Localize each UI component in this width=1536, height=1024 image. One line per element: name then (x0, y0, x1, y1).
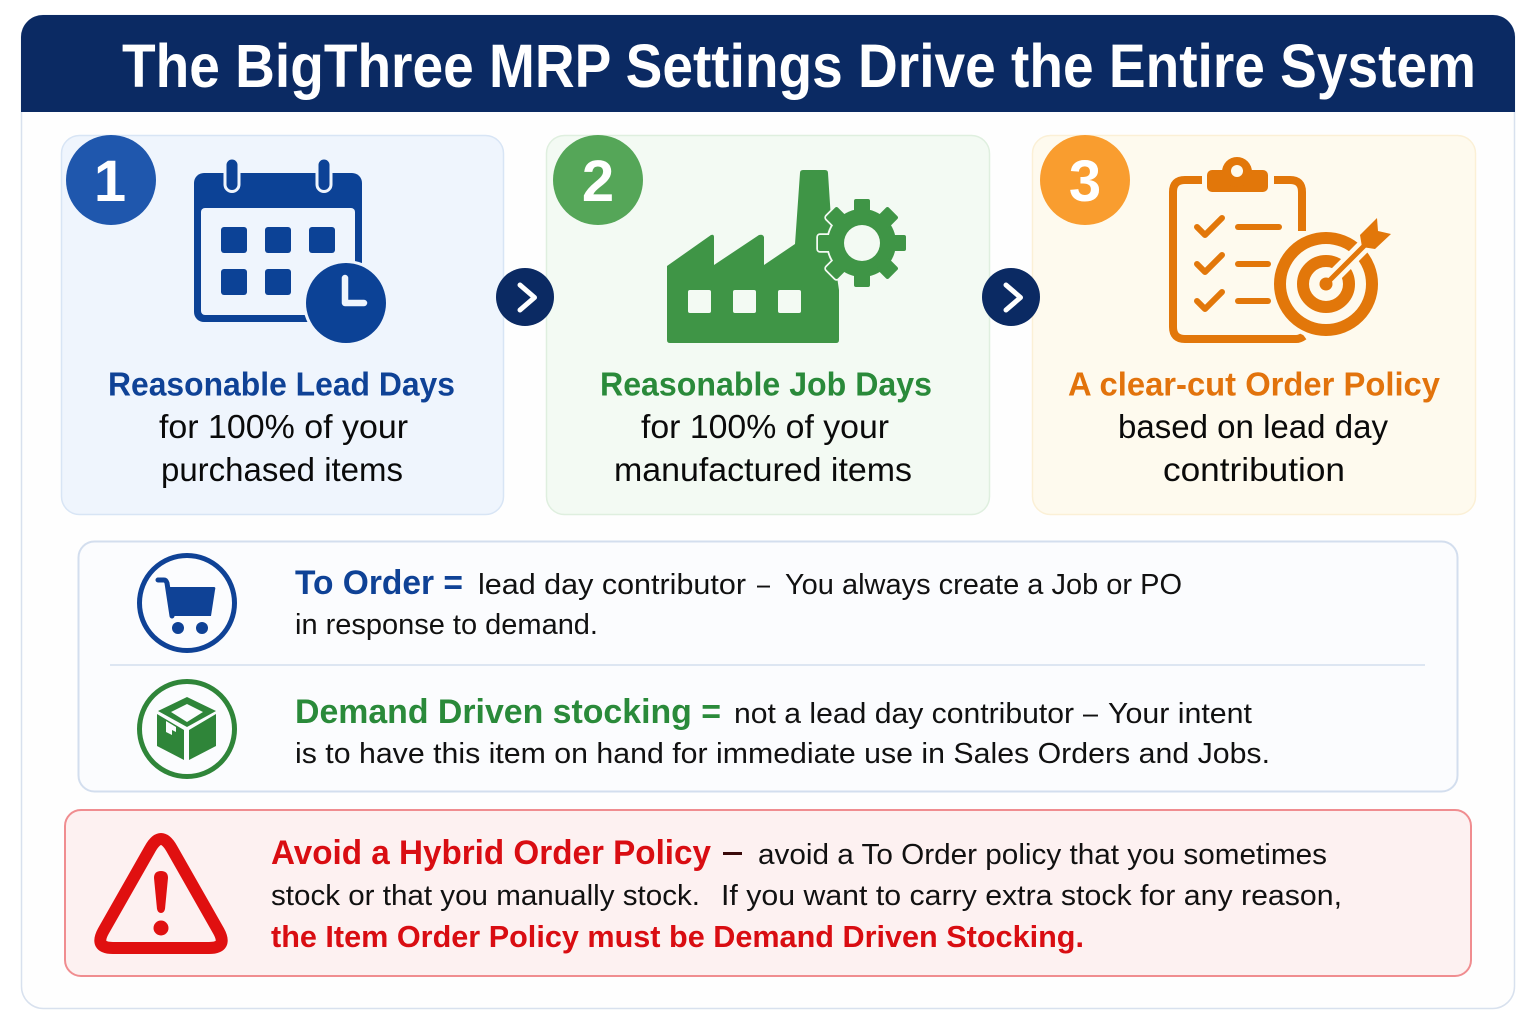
panel: reasonable job days (546, 135, 990, 514)
card text: Reasonable Lead Days (108, 366, 455, 402)
icon: box (140, 682, 234, 776)
warning text: Avoid a Hybrid Order Policy (271, 834, 711, 872)
panel: hybrid warning (65, 810, 1471, 976)
panel: reasonable lead days (62, 135, 504, 514)
icon: warning triangle (100, 839, 222, 948)
icon: checklist with target (1173, 157, 1391, 340)
card text: based on lead day (1118, 408, 1388, 445)
warning text: the Item Order Policy must be Demand Driven Stocking. (271, 919, 1084, 954)
to order text: To Order = (295, 564, 463, 602)
badge 1 (66, 135, 156, 225)
card text (1068, 366, 1441, 488)
card text: A clear-cut Order Policy (1068, 366, 1441, 402)
card text: manufactured items (614, 451, 912, 488)
to order text: lead day contributor (478, 569, 746, 601)
card text: for 100% of your (641, 408, 889, 445)
to order text (295, 564, 1182, 641)
badge 3: 3 (1069, 149, 1101, 214)
card text: for 100% of your (159, 408, 408, 445)
icon: factory with gear (667, 170, 906, 343)
demand driven text: – (1083, 698, 1099, 730)
card text (600, 366, 932, 488)
card text: Reasonable Job Days (600, 366, 932, 402)
card text (108, 366, 455, 488)
badge 2: 2 (582, 149, 614, 214)
to order text: – (757, 569, 771, 601)
demand driven text: is to have this item on hand for immediate use in Sales Orders and Jobs. (295, 738, 1270, 770)
card text: purchased items (161, 451, 403, 488)
demand driven text: not a lead day contributor (734, 698, 1074, 730)
icon: shopping cart (140, 556, 234, 650)
arrow 1 (496, 268, 554, 326)
to order text: in response to demand. (295, 609, 598, 641)
panel: clear-cut order policy (1032, 135, 1476, 514)
badge 3 (1040, 135, 1130, 225)
warning text: If you want to carry extra stock for any reason, (721, 880, 1342, 912)
warning text: stock or that you manually stock. (271, 880, 700, 912)
warning text (271, 834, 1342, 954)
title banner (21, 15, 1515, 112)
to order text: You always create a Job or PO (785, 569, 1182, 601)
demand driven text (295, 693, 1270, 770)
card text: contribution (1163, 451, 1345, 488)
arrow 2 (982, 268, 1040, 326)
warning text: avoid a To Order policy that you sometimes (758, 839, 1327, 871)
badge 2 (553, 135, 643, 225)
panel: order policy definitions (78, 542, 1458, 792)
icon: calendar with clock (194, 158, 389, 346)
badge 1: 1 (94, 149, 126, 214)
demand driven text: Demand Driven stocking = (295, 693, 721, 731)
demand driven text: Your intent (1108, 698, 1252, 730)
